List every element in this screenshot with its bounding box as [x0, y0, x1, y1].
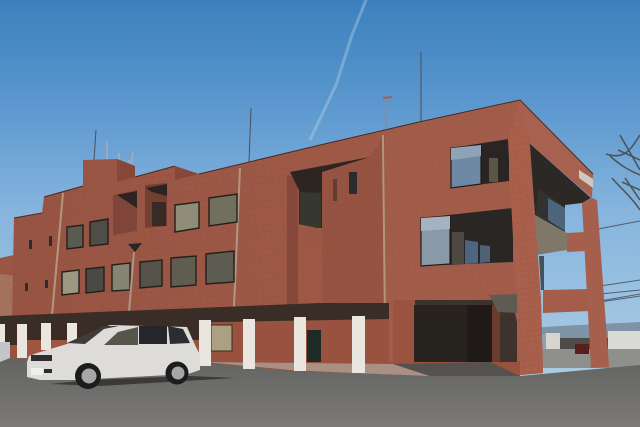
walkway — [205, 362, 430, 376]
distant scenery — [500, 316, 640, 368]
white columns — [0, 316, 365, 373]
right face upper band — [520, 100, 593, 198]
ground plane — [0, 358, 640, 427]
roof edge line — [14, 100, 593, 218]
front corner pillar — [508, 100, 543, 375]
entry base — [385, 362, 520, 378]
front wheel — [75, 363, 101, 389]
contrail — [310, 0, 366, 140]
lower right window — [421, 208, 513, 266]
building silhouette — [0, 100, 609, 375]
power lines — [598, 221, 640, 302]
side windows — [104, 327, 138, 345]
low tan wall — [0, 274, 17, 320]
right frame post — [582, 198, 609, 368]
antennas — [94, 52, 421, 176]
rear wheel — [166, 362, 188, 384]
bare tree — [606, 135, 640, 210]
small slit windows — [25, 172, 357, 291]
brick texture — [0, 100, 543, 375]
car — [27, 325, 235, 389]
upper right window — [451, 139, 509, 188]
penthouse shade — [117, 159, 135, 182]
windshield — [67, 326, 119, 344]
car shadow — [50, 376, 235, 386]
lower row windows — [62, 251, 234, 295]
canopy — [0, 303, 389, 326]
top terrace openings — [113, 183, 167, 235]
column by recess — [287, 175, 298, 307]
right-hand block — [385, 100, 543, 375]
entry floor — [393, 362, 520, 376]
left annex — [0, 255, 14, 345]
grille and lights — [31, 355, 52, 361]
ground floor entrance — [393, 294, 517, 364]
curved recessed wall — [322, 135, 385, 305]
main left wing — [0, 100, 543, 375]
upper row windows — [67, 194, 237, 249]
car body — [27, 325, 200, 380]
building sign — [579, 170, 593, 188]
under canopy wall — [0, 318, 389, 376]
recess opening with dark wedge — [290, 157, 370, 250]
drain pipes — [52, 135, 385, 330]
side opening on right face — [529, 143, 591, 313]
lamp post — [128, 243, 142, 312]
small car at left edge — [0, 342, 10, 362]
